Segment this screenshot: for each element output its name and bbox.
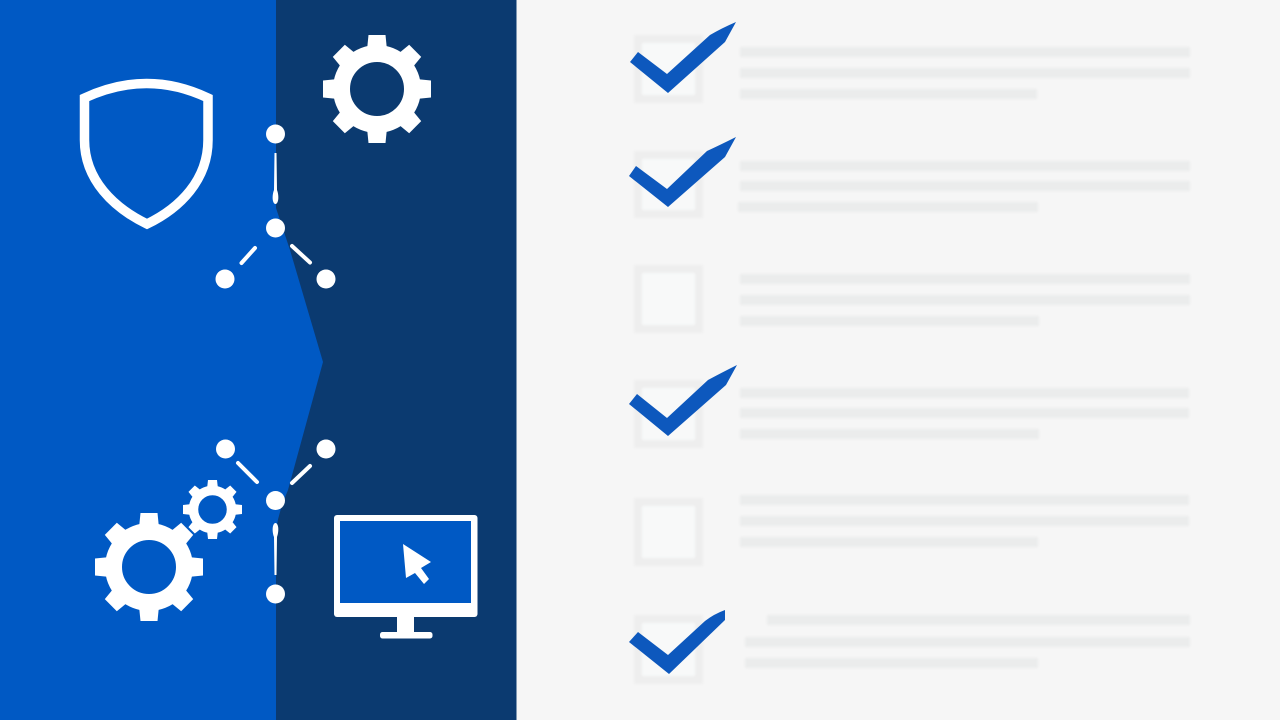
icon: shield — [84, 84, 208, 224]
icon: large gear bottom left — [95, 513, 203, 621]
icon: monitor with cursor — [334, 515, 478, 638]
icon: upper node network — [216, 124, 336, 288]
arrow: blue chevron — [275, 205, 323, 530]
panel: checklist row 3 — [638, 269, 1190, 329]
panel: checklist row 2 — [629, 137, 1190, 214]
panel: checklist row 6 — [629, 610, 1190, 680]
icon: small gear bottom left — [183, 480, 242, 539]
icon: large gear top right — [323, 35, 431, 143]
panel: checklist row 1 — [630, 22, 1190, 99]
panel: blue left column — [0, 0, 276, 720]
icon: lower node network — [216, 440, 336, 604]
panel: checklist row 5 — [638, 495, 1189, 562]
panel: checklist row 4 — [629, 365, 1189, 444]
panel: navy column — [276, 0, 516, 720]
